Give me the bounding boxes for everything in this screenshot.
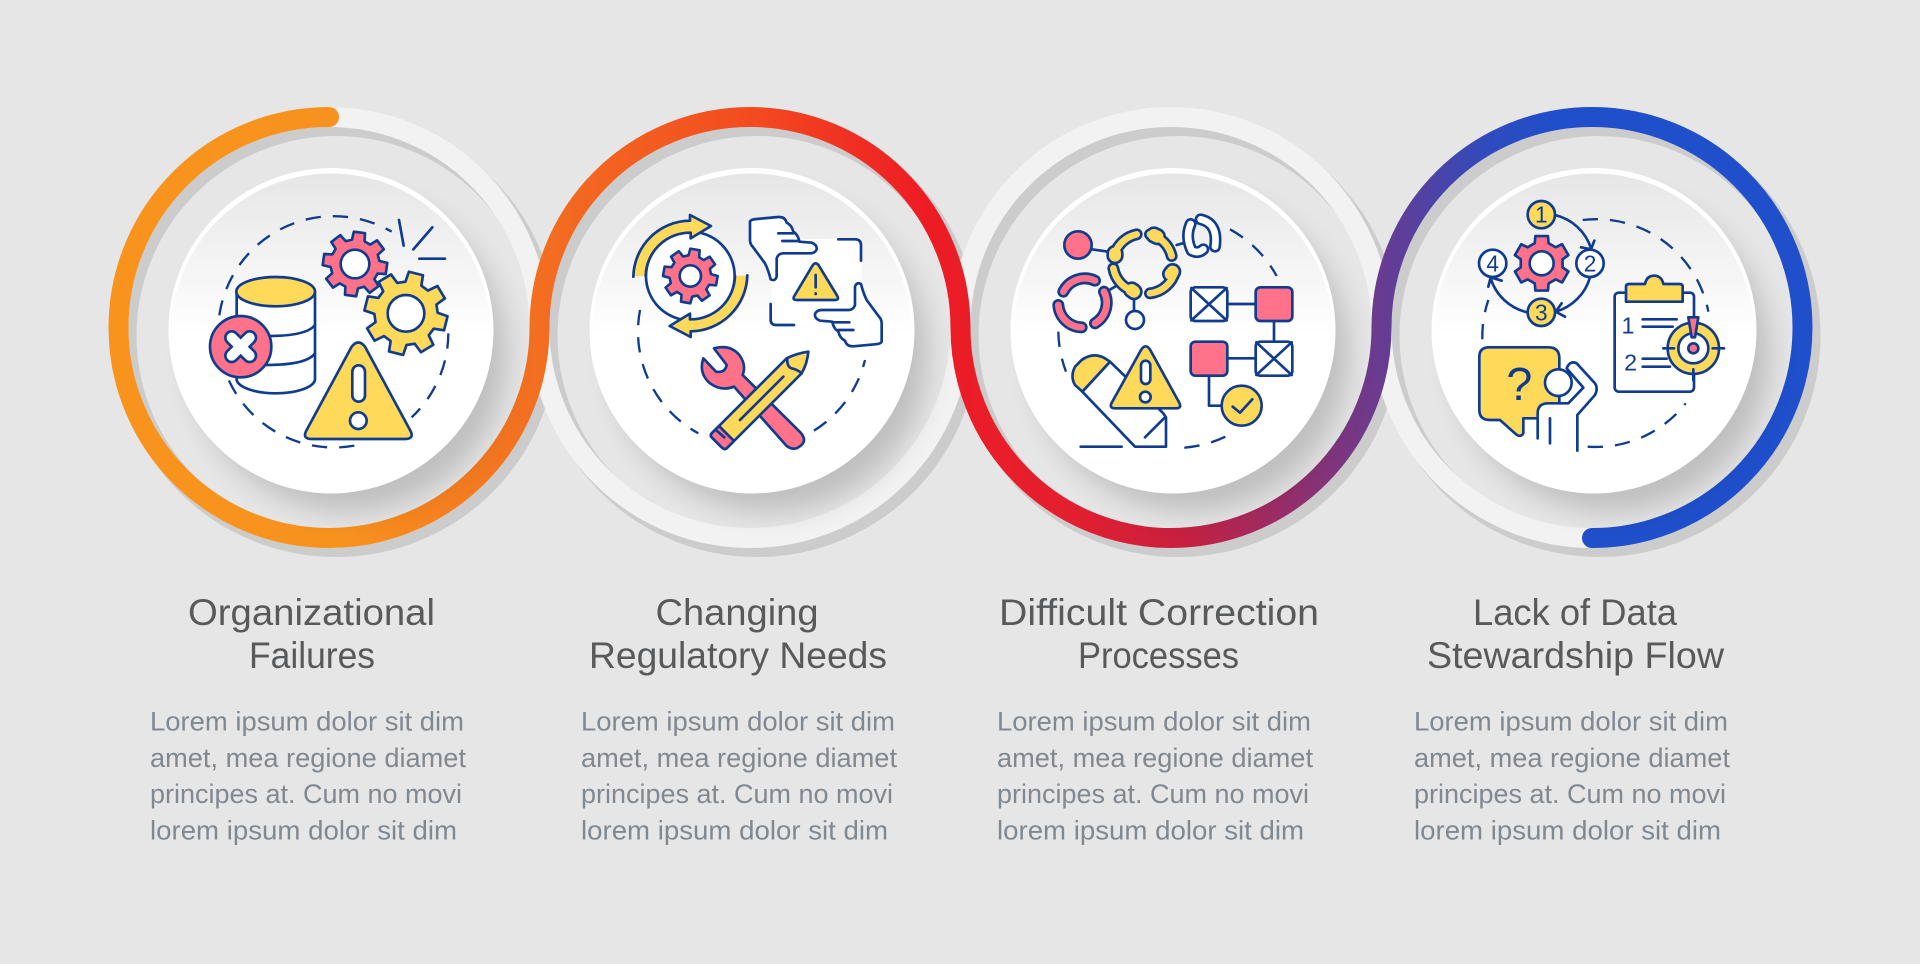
white disc 2 xyxy=(590,168,928,512)
icon: numbered cycle around gear: 3 xyxy=(1535,299,1548,325)
column 3 body text: principes at. Cum no movi xyxy=(997,779,1309,809)
icon: flowchart boxes xyxy=(1191,287,1292,426)
column 1 body text: amet, mea regione diamet xyxy=(150,743,467,773)
column 2 heading: Changing xyxy=(656,592,818,633)
column 3 body text: Lorem ipsum dolor sit dim xyxy=(997,706,1311,736)
icon: warning triangle xyxy=(305,342,412,439)
icon: database, gears and warning xyxy=(210,216,456,447)
column 1 heading xyxy=(188,592,435,676)
icon: yellow gear xyxy=(356,264,456,363)
white disc 1 xyxy=(168,168,507,512)
icon: pink process cycle xyxy=(1058,278,1107,327)
icon: yellow process cycle xyxy=(1113,234,1175,293)
column 2 body text: amet, mea regione diamet xyxy=(581,743,898,773)
icon: question speech bubble xyxy=(1479,347,1559,436)
column 3 body text: lorem ipsum dolor sit dim xyxy=(997,816,1304,846)
icon: numbered cycle around gear: 1 xyxy=(1535,202,1548,228)
column 4 body text: amet, mea regione diamet xyxy=(1414,743,1731,773)
icon: data stewardship flow xyxy=(1479,201,1724,451)
icon: regulatory change with tools xyxy=(633,215,882,449)
icon: white swirl arrows xyxy=(1188,219,1216,252)
pale base rings xyxy=(118,117,1802,538)
column 2 body text: lorem ipsum dolor sit dim xyxy=(581,816,888,846)
white disc 4 xyxy=(1432,168,1770,512)
column 4 body text: lorem ipsum dolor sit dim xyxy=(1414,816,1721,846)
icon: clipboard with target xyxy=(1615,276,1724,392)
icon: wrench xyxy=(702,347,804,449)
column 2 heading xyxy=(589,592,887,676)
column 1 body text xyxy=(150,706,467,846)
column 1 body text: lorem ipsum dolor sit dim xyxy=(150,816,457,846)
column 2 heading: Regulatory Needs xyxy=(589,635,887,676)
column 3 heading xyxy=(999,592,1319,676)
column 2 body text: principes at. Cum no movi xyxy=(581,779,893,809)
column 1 body text: principes at. Cum no movi xyxy=(150,779,462,809)
icon: correction processes xyxy=(1058,219,1292,448)
column 4 heading: Lack of Data xyxy=(1473,592,1677,633)
column 3 heading: Difficult Correction xyxy=(999,592,1319,633)
icon: numbered cycle around gear: 4 xyxy=(1486,250,1499,276)
icon: question speech bubble: ? xyxy=(1506,358,1532,410)
icon: spark lines xyxy=(399,220,445,259)
icon: framing hands with warning xyxy=(750,217,882,346)
icon: warning triangle xyxy=(1111,346,1180,408)
column 4 body text: principes at. Cum no movi xyxy=(1414,779,1726,809)
column 2 body text xyxy=(581,706,898,846)
column 4 heading xyxy=(1427,592,1724,676)
ring drop shadows xyxy=(126,125,1810,546)
column 3 body text xyxy=(997,706,1314,846)
icon: pencil xyxy=(711,352,808,449)
column 3 heading: Processes xyxy=(1078,635,1239,676)
column 3 body text: amet, mea regione diamet xyxy=(997,743,1314,773)
icon: rotating arrows and gear xyxy=(633,215,747,337)
icon: numbered cycle around gear xyxy=(1479,201,1604,326)
icon: connector nodes xyxy=(1064,231,1185,329)
icon: clipboard with target: 1 xyxy=(1622,312,1634,338)
column 1 heading: Failures xyxy=(249,635,375,676)
column 1 heading: Organizational xyxy=(188,592,435,633)
icon: clipboard with target: 2 xyxy=(1624,350,1637,376)
icon: numbered cycle around gear: 2 xyxy=(1584,250,1596,276)
column 4 heading: Stewardship Flow xyxy=(1427,635,1724,676)
column 4 body text: Lorem ipsum dolor sit dim xyxy=(1414,706,1728,736)
icon: database cylinder xyxy=(236,277,315,393)
column 4 body text xyxy=(1414,706,1731,846)
icon: eraser xyxy=(1072,355,1166,447)
icon: error badge xyxy=(210,316,271,377)
icon: pink gear xyxy=(319,228,391,300)
column 1 body text: Lorem ipsum dolor sit dim xyxy=(150,706,464,736)
column 2 body text: Lorem ipsum dolor sit dim xyxy=(581,706,895,736)
icon: confused person xyxy=(1538,362,1597,451)
white disc 3 xyxy=(1010,168,1349,512)
gradient snake line connecting the four circles xyxy=(118,117,1803,538)
